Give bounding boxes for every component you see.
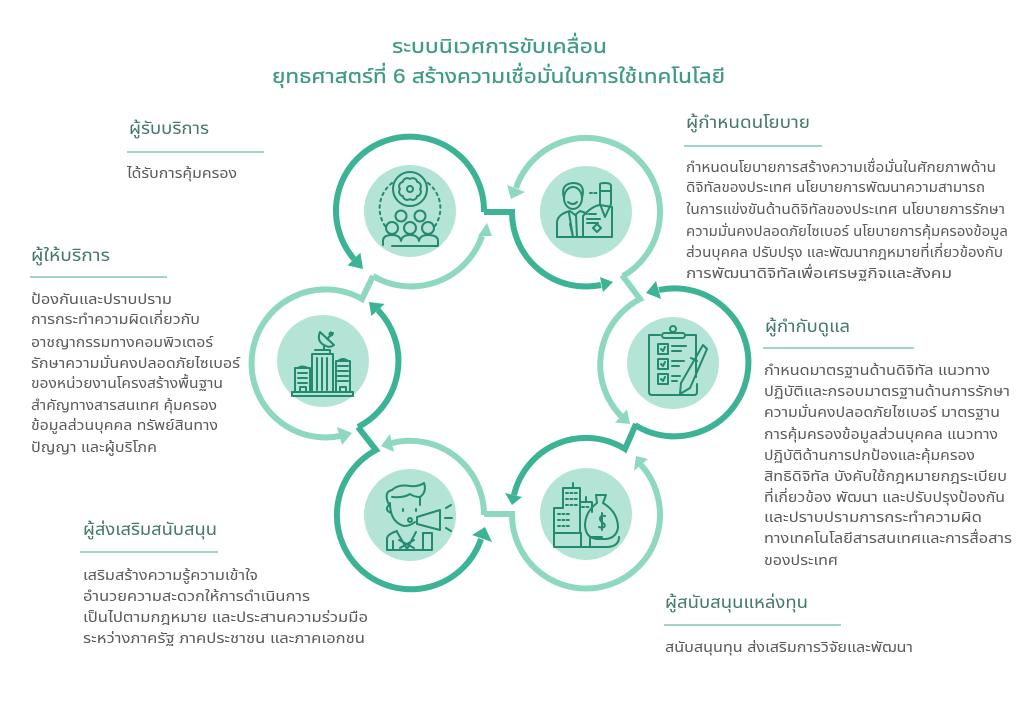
heading: ผู้สนับสนุนแหล่งทุน bbox=[665, 592, 808, 614]
body: การกระทำความผิดเกี่ยวกับ bbox=[31, 309, 200, 327]
icon: man with megaphone bbox=[364, 469, 456, 561]
text block: service recipients bbox=[126, 118, 264, 182]
body: รักษาความมั่นคงปลอดภัยไซเบอร์ bbox=[31, 354, 241, 371]
arc dark with arrow bbox=[337, 427, 492, 589]
heading: ผู้กำหนดนโยบาย bbox=[686, 112, 810, 134]
arc dark with arrow bbox=[635, 281, 748, 436]
icon: office towers with satellite dish bbox=[277, 315, 369, 407]
body: ทางเทคโนโลยีสารสนเทศและการสื่อสาร bbox=[764, 528, 1012, 546]
body bbox=[31, 291, 241, 456]
text block: service providers bbox=[30, 245, 241, 456]
body: เสริมสร้างความรู้ความเข้าใจ bbox=[83, 567, 258, 584]
heading: ผู้ให้บริการ bbox=[31, 245, 110, 267]
body: ของหน่วยงานโครงสร้างพื้นฐาน bbox=[31, 373, 223, 391]
ring: promoters bbox=[337, 427, 492, 589]
body bbox=[686, 157, 1008, 281]
heading: ผู้กำกับดูแล bbox=[765, 316, 850, 338]
body: ที่เกี่ยวข้อง พัฒนา และปรับปรุงป้องกัน bbox=[764, 487, 1005, 506]
body: ปัญญา และผู้บริโภค bbox=[31, 439, 157, 456]
heading: ผู้รับบริการ bbox=[129, 118, 209, 140]
ring: policy makers bbox=[484, 138, 660, 292]
body: การพัฒนาดิจิทัลเพื่อเศรษฐกิจและสังคม bbox=[686, 263, 952, 281]
body: ดิจิทัลของประเทศ นโยบายการพัฒนาความสามารถ bbox=[686, 179, 985, 195]
body: สนับสนุนทุน ส่งเสริมการวิจัยและพัฒนา bbox=[665, 639, 913, 656]
body: สำคัญทางสารสนเทศ คุ้มครอง bbox=[31, 397, 217, 414]
arc dark with arrow bbox=[484, 212, 613, 292]
arc light with arrow bbox=[373, 223, 492, 286]
title: ระบบนิเวศการขับเคลื่อน bbox=[392, 32, 607, 58]
arc light with arrow bbox=[484, 456, 660, 589]
text block: funding supporters bbox=[664, 592, 913, 656]
body: กำหนดนโยบายการสร้างความเชื่อมั่นในศักยภาพด้าน bbox=[686, 157, 996, 175]
arc light with arrow bbox=[600, 275, 640, 424]
text block: promoters bbox=[80, 519, 368, 646]
icon: clipboard checklist and pen bbox=[627, 317, 719, 409]
body: ความมั่นคงปลอดภัยไซเบอร์ มาตรฐาน bbox=[764, 403, 1000, 420]
ring: service recipients bbox=[336, 137, 492, 286]
body: ระหว่างภาครัฐ ภาคประชาชน และภาคเอกชน bbox=[83, 630, 365, 646]
body bbox=[83, 567, 368, 646]
body: ข้อมูลส่วนบุคคล ทรัพย์สินทาง bbox=[31, 417, 218, 434]
cycle diagram bbox=[252, 137, 748, 589]
body: กำหนดมาตรฐานด้านดิจิทัล แนวทาง bbox=[764, 362, 990, 378]
body: ของประเทศ bbox=[764, 552, 838, 568]
ring: regulators bbox=[600, 275, 748, 436]
body: ความมั่นคงปลอดภัยไซเบอร์ นโยบายการคุ้มครองข้อมูล bbox=[686, 222, 1008, 240]
arc dark with arrow bbox=[505, 424, 636, 505]
icon: gear and people bbox=[364, 165, 456, 257]
arc light with arrow bbox=[507, 138, 660, 276]
icon: city and money bag bbox=[540, 468, 632, 560]
arc dark with arrow bbox=[358, 302, 398, 427]
arc light with arrow bbox=[252, 276, 373, 445]
body bbox=[764, 362, 1012, 568]
title: ยุทธศาสตร์ที่ 6 สร้างความเชื่อมั่นในการใช้เทคโนโลยี bbox=[272, 62, 725, 88]
body: ในการแข่งขันด้านดิจิทัลของประเทศ นโยบายการรักษา bbox=[686, 201, 1005, 217]
body: ได้รับการคุ้มครอง bbox=[126, 165, 237, 182]
heading: ผู้ส่งเสริมสนับสนุน bbox=[83, 519, 217, 541]
body: เป็นไปตามกฎหมาย และประสานความร่วมมือ bbox=[83, 609, 368, 625]
body: ปฏิบัติและกรอบมาตรฐานด้านการรักษา bbox=[764, 383, 1010, 399]
body: การคุ้มครองข้อมูลส่วนบุคคล แนวทาง bbox=[764, 426, 998, 443]
body: สิทธิดิจิทัล บังคับใช้กฎหมายกฎระเบียบ bbox=[764, 468, 1007, 484]
arc dark with arrow bbox=[336, 137, 484, 269]
body: ปฏิบัติด้านการปกป้องและคุ้มครอง bbox=[764, 447, 975, 464]
body: อำนวยความสะดวกให้การดำเนินการ bbox=[83, 588, 310, 604]
body: และปราบปรามการกระทำความผิด bbox=[764, 509, 982, 525]
arc light with arrow bbox=[381, 434, 484, 515]
body: ป้องกันและปราบปราม bbox=[31, 291, 172, 307]
body: ส่วนบุคคล ปรับปรุง และพัฒนากฎหมายที่เกี่ยวข้องกับ bbox=[686, 242, 1003, 261]
title bbox=[272, 32, 725, 88]
icon: policy maker with document and pen bbox=[540, 166, 632, 258]
text block: policy makers bbox=[684, 112, 1008, 281]
body: อาชญากรรมทางคอมพิวเตอร์ bbox=[31, 334, 214, 350]
text block: regulators bbox=[763, 316, 1012, 568]
ring: funding supporters bbox=[484, 424, 660, 589]
ring: service providers bbox=[252, 276, 398, 445]
